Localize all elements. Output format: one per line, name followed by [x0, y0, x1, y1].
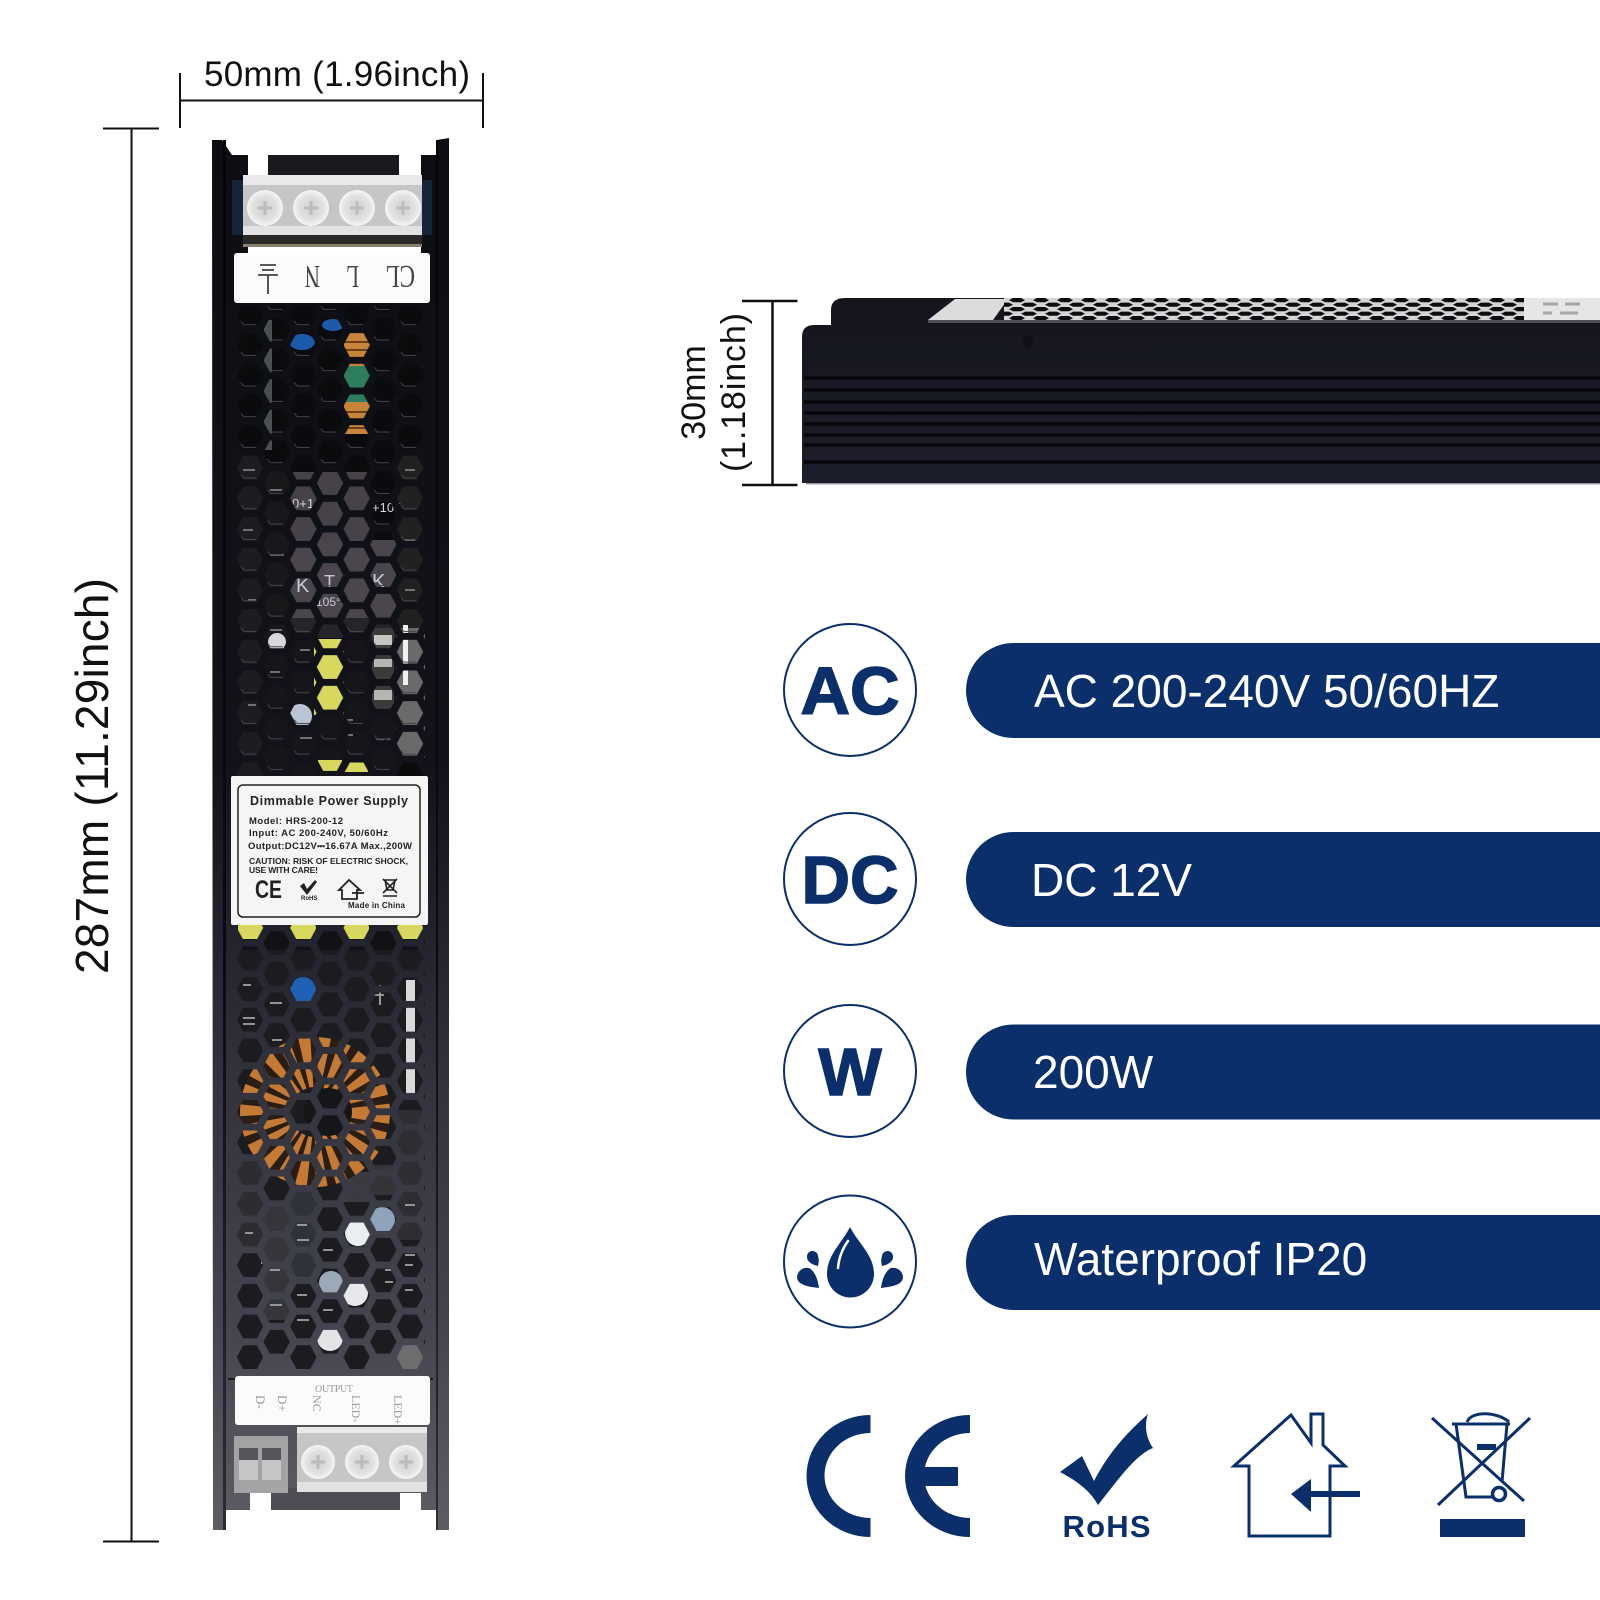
terminal label: input [234, 253, 430, 303]
dimension: height 30mm: (1.18inch) [715, 313, 753, 472]
choke coil [344, 333, 370, 434]
icon: RoHS check [1060, 1414, 1153, 1544]
product photo: top view of power supply [212, 138, 449, 1530]
pill: waterproof: Waterproof IP20 [1034, 1233, 1367, 1285]
right label sliver [1524, 298, 1600, 320]
terminal label: input: N [305, 259, 320, 294]
dimension: height 30mm [675, 301, 798, 485]
terminal label: output: NC [310, 1395, 324, 1412]
pill: DC voltage [966, 832, 1600, 927]
dimension: width 50mm [180, 55, 483, 128]
icon: CE mark [806, 1415, 970, 1537]
PCB details upper [236, 320, 426, 780]
specification label [231, 776, 428, 925]
lower board details [237, 977, 424, 1371]
pill: DC voltage: DC 12V [1031, 854, 1192, 906]
icon: water drop badge [784, 1196, 916, 1328]
yellow transformer [238, 639, 423, 939]
specification label: Made in China [348, 901, 406, 910]
dimension: height 30mm: 30mm [675, 345, 713, 440]
dimension: length 287mm: 287mm (11.29inch) [66, 578, 118, 974]
specification label: Output:DC12V⎓16.67A Max.,200W [248, 841, 412, 852]
dimension: length 287mm [66, 128, 159, 1542]
PCB details upper: K [372, 571, 386, 593]
label sliver [928, 299, 1008, 320]
cooling fins [804, 378, 1600, 462]
icon: W badge: W [818, 1035, 882, 1110]
spec row: AC input [784, 624, 1600, 756]
dimming connector [234, 1436, 288, 1493]
side body [802, 325, 1600, 483]
housing shoulders and rails [212, 138, 449, 1530]
PCB details upper: T [324, 572, 335, 592]
spec row: waterproof rating [784, 1196, 1600, 1328]
pill: AC range: AC 200-240V 50/60HZ [1034, 665, 1499, 717]
terminal label: output: LED- [349, 1395, 363, 1422]
specification label: USE WITH CARE! [249, 865, 318, 875]
icon: RoHS check: RoHS [1062, 1509, 1150, 1544]
icon: AC badge [784, 624, 916, 756]
icon: W badge [784, 1005, 916, 1137]
specification label: Model: HRS-200-12 [249, 816, 343, 827]
pill: AC range [966, 643, 1600, 738]
PCB details upper: 105°C [316, 595, 350, 609]
perforated hexagon mesh lid [226, 250, 436, 1378]
spec row: DC output [784, 813, 1600, 945]
PCB details upper: +105 [372, 500, 401, 515]
specification label: CAUTION: RISK OF ELECTRIC SHOCK, [249, 856, 408, 866]
specification label: RoHS [301, 896, 317, 902]
icon: indoor use house [1234, 1414, 1360, 1536]
dimension: width 50mm: 50mm (1.96inch) [204, 55, 470, 94]
icon: DC badge [784, 813, 916, 945]
terminal label: output: D- [253, 1395, 268, 1409]
PCB details upper: 0+10 [292, 496, 321, 511]
spec row: wattage [784, 1005, 1600, 1137]
terminal block: input [243, 175, 422, 247]
specification label: CE [255, 876, 282, 904]
product photo: side view [802, 298, 1600, 484]
terminal label: input: L [346, 259, 359, 294]
terminal label: output: LED+ [391, 1395, 405, 1425]
pill: wattage [966, 1024, 1600, 1120]
mesh strip [1004, 298, 1524, 320]
pill: waterproof [966, 1215, 1600, 1310]
toroid coil [265, 1062, 365, 1162]
internals visible through mesh [228, 300, 433, 1380]
terminal label: output: D+ [275, 1395, 290, 1412]
terminal label: input: CL [386, 258, 415, 294]
pill: wattage: 200W [1033, 1046, 1154, 1098]
specification label: Input: AC 200-240V, 50/60Hz [249, 828, 388, 839]
PCB details upper: #250 [372, 737, 392, 747]
terminal block: output [297, 1427, 427, 1492]
terminal label: output [235, 1376, 430, 1425]
capacitors blue [289, 334, 315, 350]
terminal label: output: OUTPUT [315, 1384, 353, 1395]
PCB details upper: K [296, 575, 310, 597]
hole edge highlights [236, 306, 425, 776]
icon: AC badge: AC [800, 654, 900, 729]
icon: WEEE crossed-out bin [1432, 1414, 1530, 1537]
icon: DC badge: DC [802, 843, 898, 918]
specification label: Dimmable Power Supply [250, 794, 408, 808]
